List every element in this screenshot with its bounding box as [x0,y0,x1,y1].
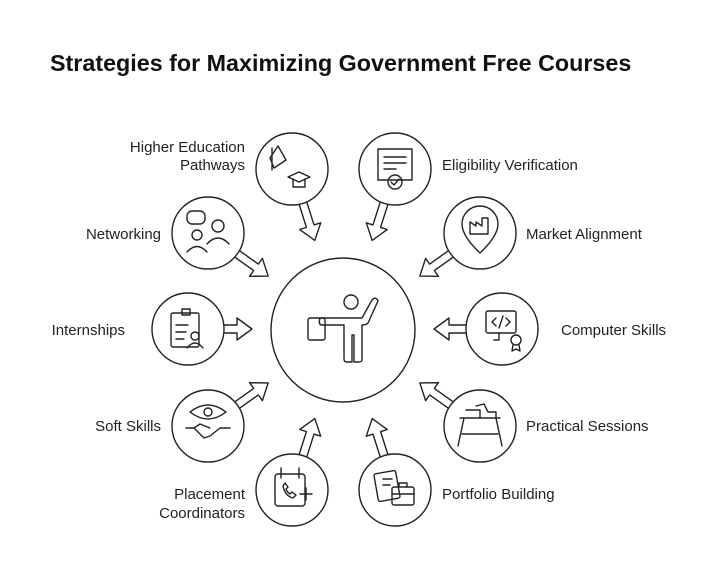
circle: higher education [256,133,328,205]
text: Pathways [180,157,245,174]
circle: portfolio [359,454,431,526]
circle: internships [152,293,224,365]
label: portfolio: Portfolio Building [442,486,555,503]
icon: higher education [270,146,310,187]
circle: computer [466,293,538,365]
arrow: placement [288,415,325,474]
text: Coordinators [159,505,245,522]
label: market: Market Alignment [526,226,643,243]
arrow: market alignment [413,236,470,285]
label: higher education: Higher Education [130,139,245,156]
icon: networking [187,211,229,252]
icon: person center [308,295,378,362]
icon: soft skills [186,405,230,438]
icon: computer [486,311,521,351]
arrow: computer skills [434,318,482,340]
label: soft skills: Soft Skills [95,418,161,435]
arrow: eligibility [362,185,399,244]
circle: practical [444,390,516,462]
arrow: soft skills [218,374,275,423]
icon: placement [275,468,312,506]
circle: market [444,197,516,269]
arrow: practical sessions [413,374,470,423]
label: networking: Networking [86,226,161,243]
label: eligibility: Eligibility Verification [442,157,578,174]
circle: soft skills [172,390,244,462]
circle: eligibility [359,133,431,205]
icon: practical [458,404,502,446]
arrow: internships [208,318,252,340]
title: Strategies for Maximizing Government Free Courses [50,50,631,76]
label: practical: Practical Sessions [526,418,649,435]
arrow: portfolio [362,415,399,474]
icon: certificate [378,149,412,189]
circle: networking [172,197,244,269]
icon: internships [171,309,203,348]
label: computer: Computer Skills [561,322,666,339]
arrow: higher education [288,185,325,244]
icon: portfolio [374,470,414,505]
arrow: networking [218,236,275,285]
center circle [271,258,415,402]
label: internships: Internships [52,322,125,339]
icon: market pin [462,206,498,253]
circle: placement [256,454,328,526]
label: placement: Placement [174,486,246,503]
